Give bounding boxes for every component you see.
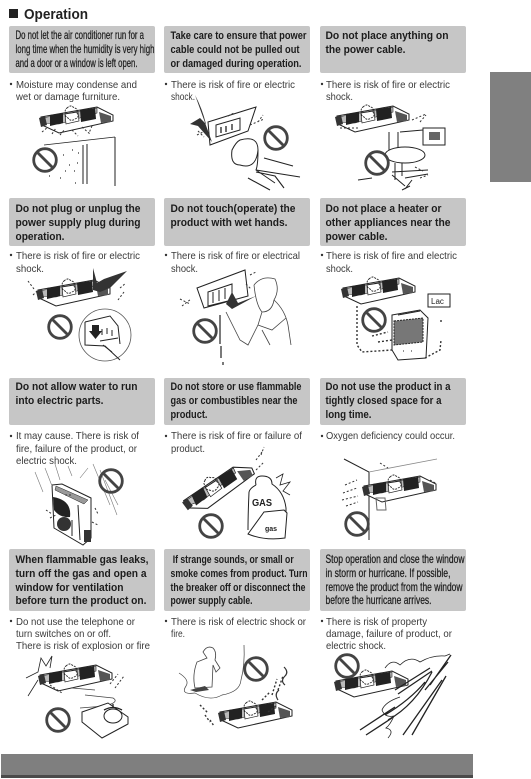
text: flammable risk: product. — [171, 444, 205, 455]
panel: nothing on cable: the power cable. — [326, 44, 406, 56]
panel: power cable pulled: or damaged during operation. — [170, 58, 302, 70]
panel: flammable gas: Do not store or use flammable — [170, 381, 302, 393]
text: fire risk: There is risk of fire and electric — [326, 251, 457, 262]
panel: plug during operation: Do not plug or unplug the — [16, 203, 140, 215]
icon: prohibition sign — [100, 470, 122, 492]
text: fire risk — [165, 80, 295, 103]
icon: prohibition sign — [194, 320, 216, 342]
text: property risk — [321, 617, 453, 652]
panel: storm: before the hurricane arrives. — [326, 593, 432, 607]
panel: strange sounds: the breaker off or disconnect the — [170, 582, 306, 594]
panel: plug during operation: operation. — [16, 231, 64, 243]
text: explosion risk — [10, 617, 150, 652]
illustration: unit in storm — [334, 654, 451, 738]
panel: nothing on cable: Do not place anything on — [326, 30, 449, 42]
text: fire risk: There is risk of fire or electrical — [171, 251, 300, 262]
text: water risk: fire, failure of the product, or — [16, 444, 138, 455]
icon: prohibition sign — [363, 309, 385, 331]
text: fire risk: There is risk of fire or electric — [326, 80, 450, 91]
panel: water — [9, 378, 155, 425]
panel: closed space: Do not use the product in a — [326, 381, 451, 393]
text: fire risk: There is risk of fire or electric — [16, 251, 140, 262]
text: fire risk — [321, 80, 450, 103]
panel: humidity warning: and a door or a window is left open. — [16, 56, 138, 70]
icon: prohibition sign — [346, 513, 368, 535]
illustration: table on power cable — [335, 105, 445, 190]
illustration: socket with pulled cable — [190, 95, 300, 190]
panel: water: into electric parts. — [16, 395, 104, 407]
panel: closed space: long time. — [326, 409, 372, 421]
icon: prohibition sign — [34, 149, 56, 171]
panel: gas leak: before turn the product on. — [16, 595, 146, 607]
illustration: heater beside unit — [341, 277, 450, 360]
panel: power cable pulled: Take care to ensure that power — [170, 30, 307, 42]
text: flammable risk: There is risk of fire or failure of — [171, 431, 302, 442]
panel: closed space: tightly closed space for a — [326, 395, 442, 407]
panel: storm: Stop operation and close the window — [326, 552, 465, 566]
panel: heater near cable: other appliances near the — [326, 217, 450, 229]
panel: wet hands: product with wet hands. — [170, 217, 288, 229]
icon: prohibition sign — [265, 127, 287, 149]
icon: prohibition sign — [245, 658, 267, 680]
panel: humidity warning: Do not let the air conditioner run for a — [16, 28, 144, 42]
text: shock risk: fire. — [171, 629, 185, 640]
panel: humidity warning: long time when the humidity is very high — [16, 42, 154, 56]
panel: closed space — [320, 378, 466, 425]
illustration: woman touching unit — [180, 270, 291, 365]
text: water risk: It may cause. There is risk of — [16, 431, 139, 442]
panel: power cable pulled — [164, 26, 310, 73]
text: property risk: electric shock. — [326, 641, 386, 652]
footer bar — [1, 754, 473, 778]
text: fire risk: shock. — [171, 264, 198, 275]
illustration: outdoor unit in rain — [35, 464, 118, 545]
text: explosion risk: There is risk of explosion or fire — [16, 641, 150, 652]
text: fire risk: shock. — [326, 92, 353, 103]
illustration: tilted unit, gas cylinder and can — [177, 447, 290, 539]
illustration: unit dripping on furniture — [39, 106, 115, 186]
panel: water: Do not allow water to run — [16, 381, 138, 393]
text: flammable risk — [165, 431, 302, 455]
text: moisture risk: wet or damage furniture. — [15, 92, 120, 103]
panel: storm — [320, 549, 466, 611]
illustration: heater beside unit: Lac — [431, 297, 444, 306]
text: fire risk — [165, 251, 300, 275]
panel: strange sounds: smoke comes from product. Turn — [170, 568, 308, 580]
text: fire risk — [10, 251, 140, 275]
panel: power cable pulled: cable could not be pulled out — [170, 44, 300, 56]
icon: prohibition sign — [49, 316, 71, 338]
text: shock risk: There is risk of electric shock or — [171, 617, 307, 628]
text: fire risk — [321, 251, 457, 275]
text: shock risk — [165, 617, 307, 640]
panel: strange sounds: power supply cable. — [170, 595, 252, 607]
text: oxygen risk: Oxygen deficiency could occur. — [326, 431, 455, 442]
panel: gas leak — [9, 549, 155, 611]
illustration: man calling beside smoking unit — [179, 645, 292, 728]
panel: flammable gas: product. — [170, 409, 208, 421]
panel: heater near cable: Do not place a heater or — [326, 203, 442, 215]
panel: flammable gas — [164, 378, 310, 425]
illustration: tilted unit, gas cylinder and can: GAS — [252, 498, 272, 509]
panel: humidity warning — [9, 26, 155, 73]
icon: prohibition sign — [366, 152, 388, 174]
icon: prohibition sign — [47, 709, 69, 731]
panel: strange sounds — [164, 549, 310, 611]
panel: gas leak: window for ventilation — [15, 582, 124, 594]
icon: prohibition sign — [200, 515, 222, 537]
heading: Operation: Operation — [24, 7, 88, 23]
panel: plug during operation: power supply plug during — [16, 217, 141, 229]
panel: strange sounds: If strange sounds, or small or — [173, 554, 294, 566]
illustration: unit in room corner — [342, 459, 437, 540]
panel: wet hands — [164, 198, 310, 246]
illustration: unit with burst and gas stove — [26, 656, 128, 738]
panel: heater near cable — [320, 198, 466, 246]
panel: gas leak: turn off the gas and open a — [16, 568, 147, 580]
text: fire risk: There is risk of fire or electric — [171, 80, 295, 91]
text: fire risk: shock. — [171, 92, 195, 103]
text: property risk: damage, failure of product, or — [326, 629, 453, 640]
panel: plug during operation — [9, 198, 155, 246]
text: moisture risk — [10, 80, 137, 103]
text: explosion risk: turn switches on or off. — [16, 629, 111, 640]
panel: nothing on cable — [320, 26, 466, 73]
illustration: tilted unit, gas cylinder and can: gas — [265, 526, 277, 533]
panel: storm: in storm or hurricane. If possible, — [326, 566, 450, 580]
illustration: unit with lightning and plug detail — [28, 268, 131, 361]
text: water risk: electric shock. — [16, 456, 77, 467]
panel: flammable gas: gas or combustibles near the — [170, 395, 298, 407]
panel: gas leak: When flammable gas leaks, — [16, 554, 148, 566]
text: fire risk: shock. — [326, 264, 353, 275]
text: explosion risk: Do not use the telephone or — [16, 617, 136, 628]
icon: prohibition sign — [336, 655, 358, 677]
side tab — [490, 72, 531, 182]
panel: wet hands: Do not touch(operate) the — [170, 203, 296, 215]
panel: heater near cable: power cable. — [326, 231, 388, 243]
text: moisture risk: Moisture may condense and — [16, 80, 137, 91]
text: property risk: There is risk of property — [326, 617, 428, 628]
panel: storm: remove the product from the window — [326, 580, 463, 594]
text: fire risk: shock. — [16, 264, 44, 275]
text: water risk — [10, 431, 139, 467]
